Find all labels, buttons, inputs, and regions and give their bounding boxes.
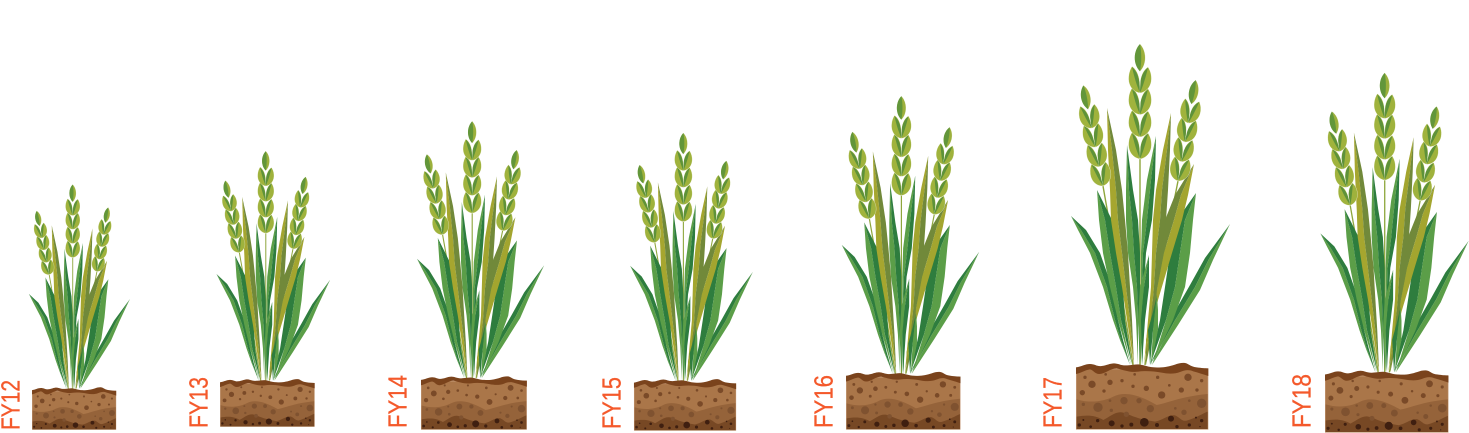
FY14 plant and soil (417, 121, 544, 430)
FY16 plant and soil (842, 96, 979, 430)
FY14 label: FY14 (382, 375, 412, 428)
FY18 label: FY18 (1286, 374, 1316, 428)
FY15 plant and soil (630, 133, 753, 431)
FY17 label: FY17 (1038, 377, 1068, 428)
FY13 plant and soil (216, 151, 330, 427)
FY17 plant and soil (1071, 44, 1230, 430)
FY18 plant and soil (1320, 73, 1469, 433)
FY16 label: FY16 (808, 375, 838, 428)
FY13 label: FY13 (184, 377, 214, 428)
FY15 label: FY15 (596, 377, 626, 429)
FY12 plant and soil (29, 184, 130, 430)
